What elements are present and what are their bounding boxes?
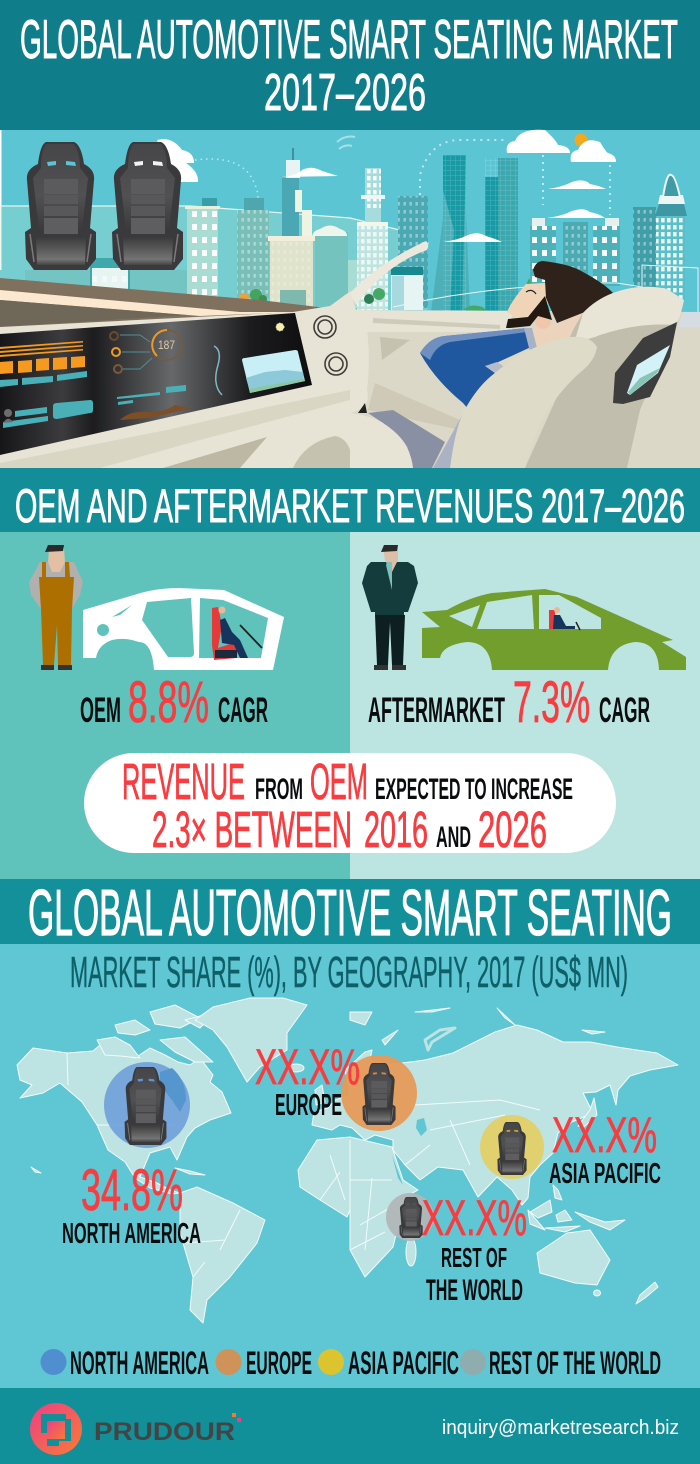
hair	[533, 261, 613, 323]
tree behind face	[523, 278, 535, 292]
OEM CAGR line: OEM	[80, 691, 121, 730]
label: Europe: XX.X%	[255, 1039, 360, 1095]
headrest screen	[613, 322, 677, 404]
Africa	[298, 1137, 418, 1277]
label: Europe	[255, 1039, 360, 1122]
section heading band: revenues	[0, 468, 700, 532]
marker: Rest of the World	[386, 1193, 434, 1241]
Indonesia and Philippines	[528, 1210, 545, 1230]
contact email: inquiry@marketresearch.biz	[442, 1417, 679, 1439]
callout: revenue: REVENUE	[122, 753, 245, 810]
footer	[0, 1388, 700, 1464]
beard	[506, 296, 552, 328]
Aftermarket CAGR line: 7.3%	[513, 670, 590, 735]
title text line 2: 2017–2026	[264, 64, 426, 122]
icon: car frame	[83, 588, 284, 670]
label: Asia Pacific	[549, 1107, 661, 1190]
section heading band: market share	[0, 876, 700, 949]
Eurasia	[312, 1025, 678, 1205]
panel: OEM: CAGR	[218, 691, 268, 730]
interior right	[350, 241, 700, 468]
dashboard sun	[276, 323, 284, 331]
water: Caspian and Red Sea	[392, 1118, 427, 1185]
reclined seat	[450, 287, 684, 468]
UK	[315, 1085, 325, 1105]
marker: Europe	[341, 1055, 417, 1131]
hero illustration	[0, 130, 700, 468]
seat: right	[112, 142, 183, 270]
Aftermarket CAGR line: AFTERMARKET	[368, 691, 505, 730]
logo wordmark: PRUDOUR	[94, 1418, 235, 1446]
label: North America	[62, 1158, 201, 1250]
dashboard map screen	[242, 350, 305, 393]
panel: Aftermarket	[350, 532, 700, 880]
man	[350, 261, 613, 468]
Arctic and small islands	[350, 1012, 372, 1025]
torso and neck	[507, 312, 590, 372]
Greenland	[195, 998, 307, 1082]
control knobs	[314, 316, 347, 375]
callout: revenue	[84, 753, 616, 858]
clouds and sun	[157, 130, 616, 242]
North America	[17, 1045, 231, 1194]
label: Rest of the World	[422, 1190, 527, 1307]
skyline	[0, 130, 698, 312]
legend: EUROPE	[246, 1345, 312, 1381]
label: Rest of the World: XX.X%	[422, 1190, 527, 1246]
map: borders	[67, 1053, 540, 1277]
lower dash shading	[0, 390, 350, 468]
callout: revenue: FROM	[255, 773, 303, 806]
map: continents	[17, 998, 678, 1323]
callout: revenue: 2026	[478, 801, 547, 858]
hood and dash base	[0, 278, 700, 468]
New Zealand	[636, 1282, 658, 1304]
marker: North America	[104, 1062, 190, 1148]
legend: NORTH AMERICA	[70, 1345, 209, 1381]
legend	[40, 1345, 661, 1381]
icon: businessman	[362, 545, 418, 670]
dashboard teal bars	[0, 371, 186, 428]
trees	[239, 288, 486, 311]
icon: driver	[212, 606, 262, 660]
logo accent pixels	[232, 1413, 241, 1422]
Iceland	[288, 1064, 304, 1072]
icon: car driver	[549, 607, 580, 630]
Japan	[578, 1098, 597, 1127]
OEM CAGR line: 8.8%	[128, 670, 209, 735]
Australia	[537, 1230, 610, 1285]
label: North America: 34.8%	[81, 1158, 183, 1223]
legend: ASIA PACIFIC	[348, 1345, 459, 1381]
Madagascar	[406, 1238, 416, 1266]
marker: Asia Pacific	[480, 1115, 544, 1179]
speed gauge	[110, 330, 182, 373]
title band	[0, 0, 700, 130]
callout: revenue: 2016	[364, 801, 428, 858]
dashboard orange bars	[0, 341, 85, 374]
Novaya Zemlya	[425, 1028, 455, 1050]
logo mark	[30, 1403, 82, 1455]
callout: revenue: OEM	[310, 753, 368, 810]
dashboard screen	[0, 313, 312, 455]
eye	[526, 290, 536, 294]
label: Europe: EUROPE	[275, 1087, 342, 1122]
label: North America: NORTH AMERICA	[62, 1218, 201, 1250]
label: Rest of the World: THE WORLD	[426, 1274, 523, 1307]
label: Rest of the World: REST OF	[441, 1242, 507, 1273]
blue arm	[420, 328, 531, 417]
Aftermarket CAGR line: CAGR	[599, 691, 650, 730]
speed gauge: 187	[158, 338, 175, 352]
callout: revenue: AND	[436, 821, 471, 854]
Aftermarket CAGR line	[368, 670, 650, 735]
icon: worker	[29, 545, 83, 670]
panel: OEM	[0, 532, 350, 880]
trousers	[368, 410, 445, 468]
South America	[180, 1187, 265, 1323]
panel: world map	[0, 944, 700, 1388]
callout: revenue: 2.3× BETWEEN	[152, 801, 352, 858]
icon: green car	[422, 589, 686, 670]
face	[507, 283, 548, 322]
seat: left	[25, 142, 96, 270]
Cuba	[175, 1168, 205, 1175]
